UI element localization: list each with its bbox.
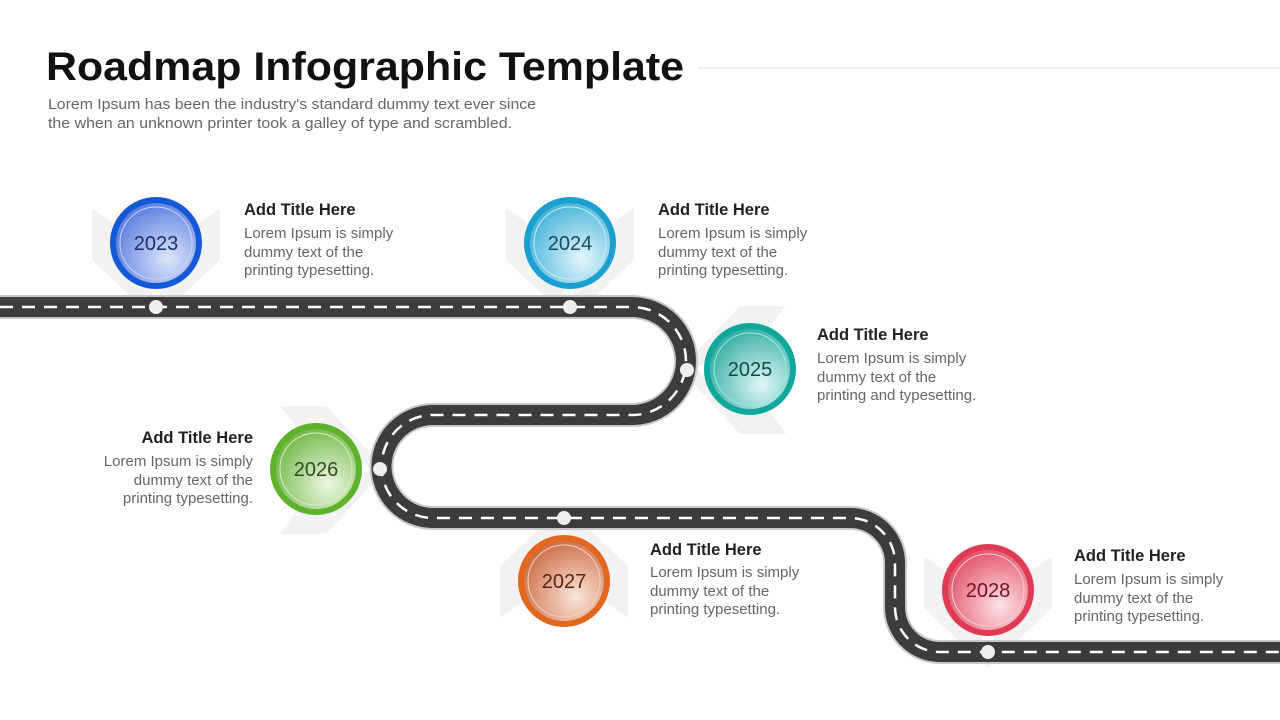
text block 2024: dummy text of the — [658, 244, 777, 261]
text block 2026: printing typesetting. — [123, 490, 253, 507]
text block 2023: Lorem Ipsum is simply — [244, 225, 394, 242]
text block 2025: printing and typesetting. — [817, 387, 976, 404]
text block 2027: printing typesetting. — [650, 601, 780, 618]
text block 2028: Lorem Ipsum is simply — [1074, 571, 1224, 588]
milestone 2023 — [110, 197, 202, 289]
text block 2026 — [104, 429, 253, 507]
text block 2025 — [817, 326, 976, 404]
milestone 2028 — [942, 544, 1034, 636]
milestone 2027 — [518, 535, 610, 627]
text block 2028 — [1074, 547, 1224, 625]
milestone 2023: 2023 — [134, 233, 178, 255]
text block 2024 — [658, 201, 808, 279]
subtitle — [48, 97, 536, 132]
text block 2028: dummy text of the — [1074, 590, 1193, 607]
text block 2027: Lorem Ipsum is simply — [650, 564, 800, 581]
milestone 2024 — [524, 197, 616, 289]
milestone 2027: 2027 — [542, 571, 586, 593]
milestone 2024: 2024 — [548, 233, 592, 255]
text block 2024: Lorem Ipsum is simply — [658, 225, 808, 242]
text block 2026: Lorem Ipsum is simply — [104, 453, 253, 470]
chevrons background — [92, 208, 1052, 668]
text block 2023 — [244, 201, 394, 279]
milestone 2025 — [704, 323, 796, 415]
milestone 2025: 2025 — [728, 359, 772, 381]
text block 2026: Add Title Here — [141, 429, 253, 447]
title: Roadmap Infographic Template — [46, 45, 684, 89]
text block 2025: dummy text of the — [817, 369, 936, 386]
text block 2024: Add Title Here — [658, 201, 770, 219]
text block 2023: Add Title Here — [244, 201, 356, 219]
text block 2028: printing typesetting. — [1074, 608, 1204, 625]
text block 2023: printing typesetting. — [244, 262, 374, 279]
connector dots — [149, 300, 995, 659]
milestone 2028: 2028 — [966, 580, 1010, 602]
subtitle: the when an unknown printer took a galley of type and scrambled. — [48, 116, 512, 132]
text block 2025: Add Title Here — [817, 326, 929, 344]
milestone 2026: 2026 — [294, 459, 338, 481]
text block 2027 — [650, 541, 800, 618]
text block 2027: Add Title Here — [650, 541, 762, 559]
road — [0, 307, 1280, 652]
text block 2027: dummy text of the — [650, 583, 769, 600]
milestone 2026 — [270, 423, 362, 515]
text block 2024: printing typesetting. — [658, 262, 788, 279]
text block 2026: dummy text of the — [134, 472, 253, 489]
text block 2028: Add Title Here — [1074, 547, 1186, 565]
text block 2025: Lorem Ipsum is simply — [817, 350, 967, 367]
subtitle: Lorem Ipsum has been the industry's standard dummy text ever since — [48, 97, 536, 113]
text block 2023: dummy text of the — [244, 244, 363, 261]
